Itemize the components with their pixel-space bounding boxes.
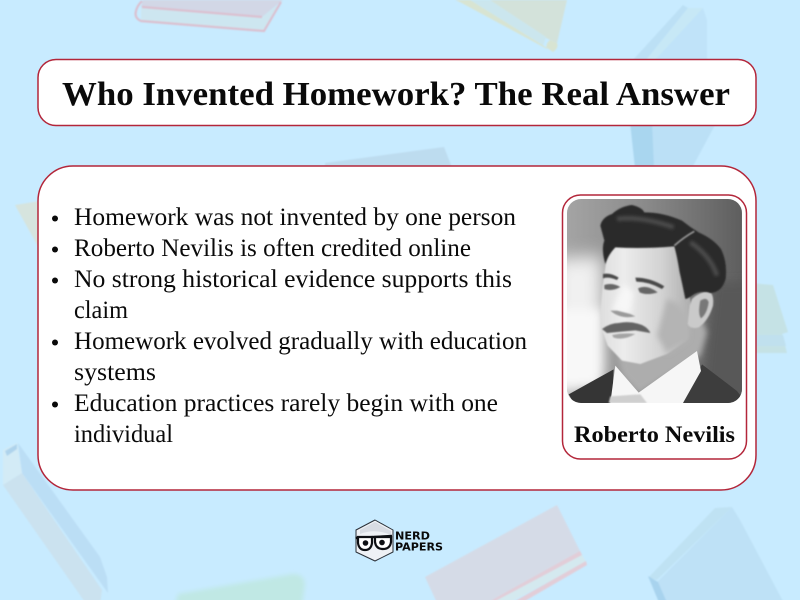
book: left behind main card [15, 201, 40, 250]
book: pink top left [136, 0, 283, 31]
logo: Nerd Papers [356, 520, 443, 561]
book: grey behind main card [325, 147, 453, 170]
logo wordmark: PAPERS [395, 542, 443, 554]
portrait card [554, 195, 754, 459]
portrait photo [567, 199, 742, 403]
bullet list: Homework was not invented by one person [74, 204, 516, 231]
book: pale green right [750, 283, 788, 353]
icon: hexagon head with glasses [356, 520, 393, 561]
logo wordmark [395, 530, 443, 554]
book: blue top right [633, 5, 707, 60]
book: pink bottom [425, 505, 587, 600]
bullet list: Homework evolved gradually with education [74, 328, 527, 355]
bullet list: Education practices rarely begin with one [74, 390, 498, 417]
book: green bottom [175, 574, 305, 600]
book: green top centre [455, 0, 567, 52]
bullet list: Roberto Nevilis is often credited online [74, 235, 471, 262]
bullet list: No strong historical evidence supports this [74, 266, 512, 293]
bullet list: individual [74, 421, 173, 448]
book: blue behind title and main panel [630, 122, 715, 168]
logo wordmark: NERD [395, 530, 430, 542]
bullet list [52, 204, 527, 448]
bullet list: systems [74, 359, 156, 386]
bullet list: claim [74, 297, 129, 324]
portrait caption: Roberto Nevilis [574, 422, 735, 448]
book: blue bottom left [3, 443, 108, 600]
main panel [38, 166, 756, 490]
title: Who Invented Homework? The Real Answer [62, 76, 730, 113]
book: blue bottom right [648, 507, 785, 600]
title panel [38, 60, 756, 126]
